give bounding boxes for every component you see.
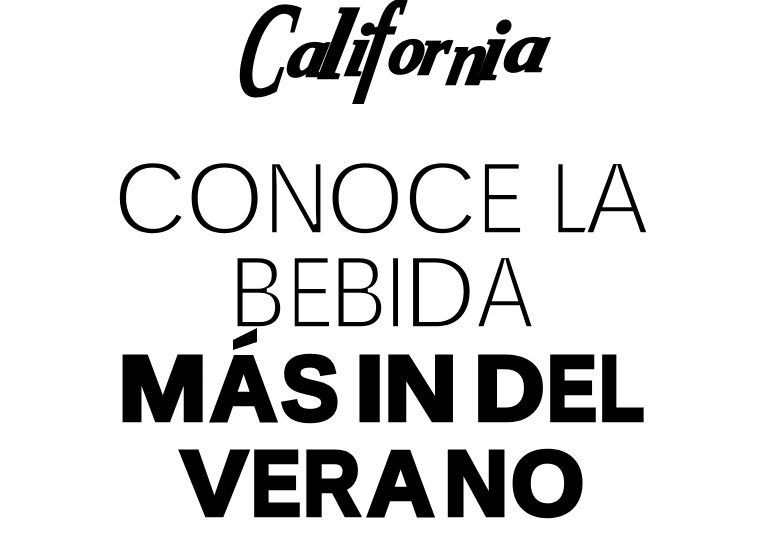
script title: California: n: [441, 14, 497, 101]
heading line: CONOCE LA: A: [585, 141, 649, 257]
bold heading line: MÁS IN DEL: Á: [210, 336, 277, 440]
accent mark on Á: [233, 328, 257, 350]
bold heading line: MÁS IN DEL: [118, 328, 644, 440]
bold heading line: MÁS IN DEL: S: [281, 336, 339, 440]
heading line: BEBIDA: A: [476, 235, 534, 351]
heading line: CONOCE LA: C: [113, 141, 188, 257]
bold heading line: MÁS IN DEL: L: [599, 336, 644, 440]
bold heading line: VERANO: E: [251, 431, 300, 535]
script title: California: r: [414, 13, 458, 90]
heading line: CONOCE LA: C: [403, 141, 478, 257]
heading line: BEBIDA: B: [330, 235, 387, 351]
bold heading line: VERANO: R: [303, 431, 361, 535]
heading line: BEBIDA: D: [403, 235, 476, 351]
heading line: CONOCE LA: N: [263, 141, 330, 257]
bold heading line: MÁS IN DEL: I: [355, 336, 384, 440]
heading line: CONOCE LA: O: [185, 141, 264, 257]
heading line: CONOCE LA: L: [551, 141, 592, 257]
heading line: BEBIDA: B: [229, 235, 286, 351]
bold heading line: MÁS IN DEL: M: [118, 336, 207, 440]
heading line: CONOCE LA: O: [326, 141, 405, 257]
bold heading line: VERANO: A: [366, 431, 434, 535]
script title: California: o: [383, 12, 434, 89]
heading line: BEBIDA: [229, 235, 534, 351]
script title: California: [226, 0, 557, 125]
script title: California: i: [340, 10, 378, 92]
heading line: BEBIDA: E: [288, 235, 333, 351]
bold heading line: MÁS IN DEL: E: [547, 336, 596, 440]
script title: California: a: [499, 10, 557, 87]
bold heading line: VERANO: [178, 431, 584, 535]
script title: California: a: [282, 15, 337, 92]
heading line: CONOCE LA: [113, 141, 649, 257]
heading line: CONOCE LA: E: [478, 141, 524, 257]
bold heading line: MÁS IN DEL: D: [474, 336, 545, 440]
bold heading line: VERANO: N: [444, 431, 508, 535]
heading line: BEBIDA: I: [384, 235, 407, 351]
bold heading line: VERANO: V: [181, 431, 247, 535]
bold heading line: VERANO: O: [511, 431, 584, 535]
bold heading line: MÁS IN DEL: N: [384, 336, 457, 440]
script title: California: i: [472, 5, 515, 98]
